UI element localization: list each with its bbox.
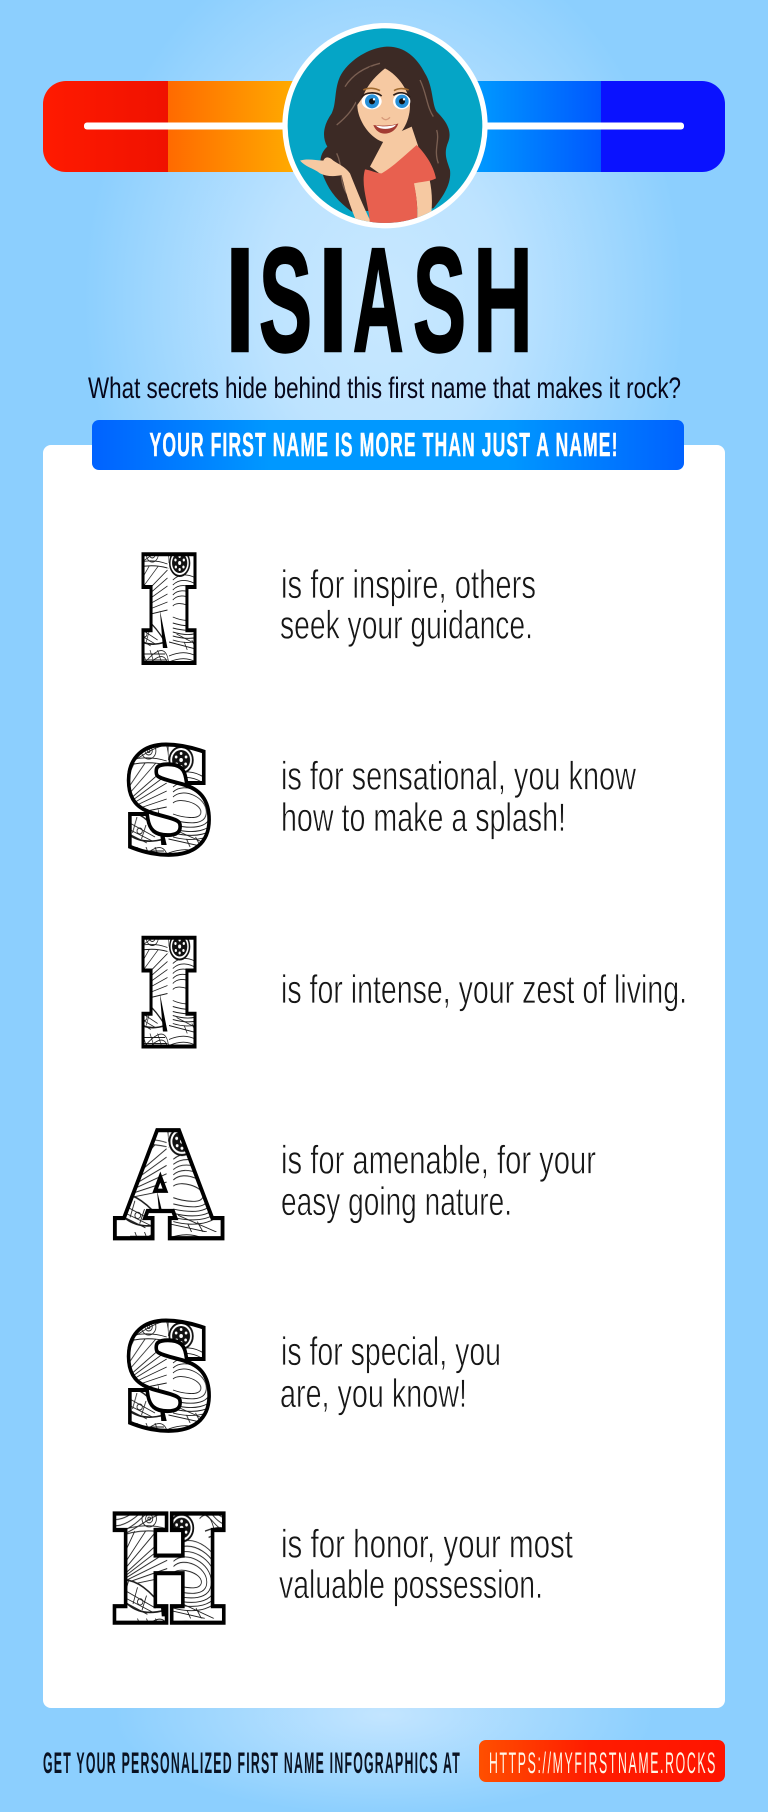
footer url button — [479, 1740, 725, 1782]
title: H — [474, 218, 532, 383]
banner — [92, 420, 684, 470]
title: S — [413, 218, 466, 383]
decorative letter I: I — [149, 928, 189, 1061]
row 4 text — [281, 1138, 596, 1224]
row 6 text: valuable possession. — [279, 1563, 543, 1607]
row 4: letter A — [121, 1109, 596, 1263]
row 6: letter H — [112, 1489, 573, 1652]
row 5: letter S — [126, 1302, 501, 1455]
title: A — [353, 218, 404, 383]
row 3: letter I — [149, 928, 687, 1061]
row 2 text: how to make a splash! — [281, 796, 566, 840]
row 1 text: is for inspire, others — [281, 563, 536, 607]
left arm and hand — [300, 157, 372, 223]
right arm — [414, 180, 432, 218]
nose and mouth — [373, 117, 398, 134]
row 4 text: is for amenable, for your — [281, 1138, 596, 1182]
shirt — [364, 145, 436, 227]
row 5 text — [280, 1330, 501, 1416]
header gradient bar — [43, 81, 725, 172]
row 5 text: is for special, you — [281, 1330, 501, 1374]
hair — [320, 47, 450, 212]
decorative letter H: H — [112, 1489, 226, 1652]
neck and chest — [370, 127, 418, 175]
decorative letter I: I — [149, 928, 189, 1061]
title — [225, 218, 532, 383]
decorative letter A: A — [121, 1109, 217, 1263]
face — [357, 68, 410, 142]
decorative letter I: I — [149, 544, 189, 677]
row 6 text: is for honor, your most — [281, 1522, 573, 1566]
avatar: cartoon woman in circle — [282, 23, 488, 228]
title: S — [259, 218, 312, 383]
decorative letter S: S — [126, 1302, 211, 1455]
decorative letter S: S — [126, 726, 211, 879]
white content panel — [43, 445, 725, 1708]
title: I — [318, 218, 348, 383]
title: I — [225, 218, 255, 383]
decorative letter S: S — [126, 726, 211, 879]
decorative letter A: A — [121, 1109, 217, 1263]
row 4 text: easy going nature. — [281, 1180, 512, 1224]
decorative letter I: I — [149, 544, 189, 677]
row 1 text: seek your guidance. — [280, 604, 533, 648]
row 2 text — [281, 754, 636, 840]
row 2 text: is for sensational, you know — [281, 754, 636, 798]
decorative letter S: S — [126, 1302, 211, 1455]
row 5 text: are, you know! — [280, 1372, 467, 1416]
decorative letter H: H — [112, 1489, 226, 1652]
row 2: letter S — [126, 726, 636, 879]
eyes — [362, 88, 410, 109]
row 1 text — [280, 563, 536, 648]
row 1: letter I — [149, 544, 536, 677]
row 6 text — [279, 1522, 573, 1607]
